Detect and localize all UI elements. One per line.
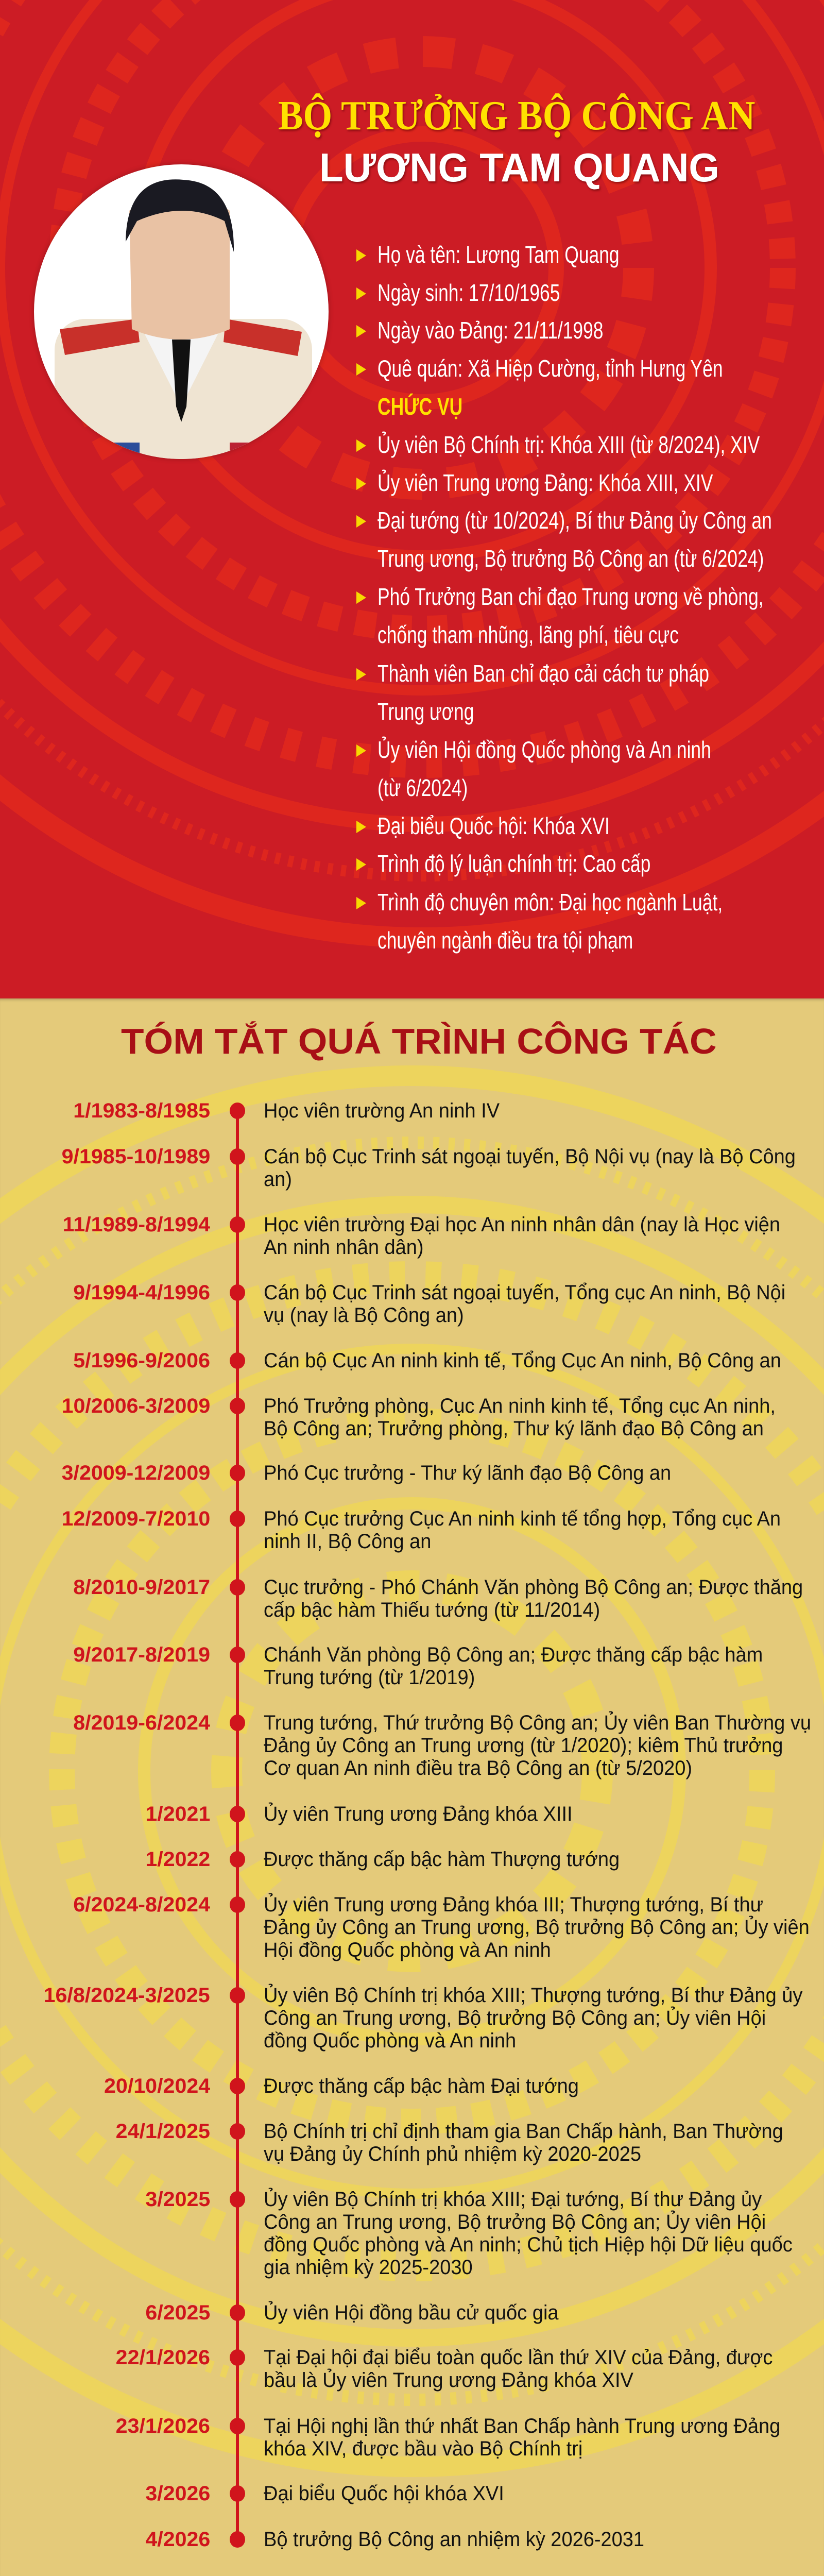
entry 9/1994: 9/1994-4/1996: [73, 1281, 210, 1304]
entry 8/2010: Cục trưởng - Phó Chánh Văn phòng Bộ Công an; Được thăng: [264, 1576, 803, 1599]
timeline entries: đồng Quốc phòng và An ninh: [264, 2029, 516, 2052]
info list: personal: Trung ương: [377, 698, 474, 725]
bullet: party: [356, 317, 603, 344]
entry 3/2009: 3/2009-12/2009: [61, 1462, 210, 1484]
entry 8/2019: [73, 1711, 811, 1780]
entry 1/1983: 1/1983-8/1985: [73, 1099, 210, 1122]
timeline entries: gia nhiệm kỳ 2025-2030: [264, 2256, 473, 2279]
info list: personal: Đại biểu Quốc hội: Khóa XVI: [377, 812, 610, 839]
entry 6/2024: [73, 1893, 810, 1961]
timeline line: [236, 1111, 239, 2540]
bullet: [356, 469, 713, 496]
entry 23/1/2026: 23/1/2026: [116, 2415, 210, 2437]
timeline entries: Trung tướng (từ 1/2019): [264, 1666, 475, 1689]
bullet: [356, 507, 772, 572]
entry 6/2024: Ủy viên Trung ương Đảng khóa III; Thượng tướng, Bí thư: [264, 1893, 763, 1916]
entry 10/2006: Phó Trưởng phòng, Cục An ninh kinh tế, Tổng cục An ninh,: [264, 1395, 776, 1417]
timeline entries: vụ Đảng ủy Chính phủ nhiệm kỳ 2020-2025: [264, 2143, 641, 2165]
info list: personal: [356, 241, 772, 954]
bullet: [356, 850, 650, 877]
entry 6/2024: 6/2024-8/2024: [73, 1893, 210, 1916]
entry 8/2010: 8/2010-9/2017: [73, 1576, 210, 1599]
info list: personal: Thành viên Ban chỉ đạo cải cách tư pháp: [377, 660, 709, 687]
timeline entries: Công an Trung ương, Bộ trưởng Bộ Công an; Ủy viên Hội: [264, 2211, 766, 2233]
entry 8/2019: Trung tướng, Thứ trưởng Bộ Công an; Ủy viên Ban Thường vụ: [264, 1711, 811, 1734]
entry 11/1989: 11/1989-8/1994: [63, 1213, 210, 1236]
info list: personal: Phó Trưởng Ban chỉ đạo Trung ương về phòng,: [377, 583, 764, 610]
entry 3/2026: [145, 2482, 504, 2505]
entry 8/2019: 8/2019-6/2024: [73, 1711, 210, 1734]
bullet: [356, 889, 723, 954]
entry 6/2025: Ủy viên Hội đồng bầu cử quốc gia: [264, 2301, 559, 2324]
timeline entries: an): [264, 1168, 292, 1191]
entry 9/2017: Chánh Văn phòng Bộ Công an; Được thăng cấp bậc hàm: [264, 1643, 763, 1666]
entry 1/2022: 1/2022: [145, 1848, 210, 1871]
entry 16/8/2024: Ủy viên Bộ Chính trị khóa XIII; Thượng tướng, Bí thư Đảng ủy: [264, 1984, 802, 2007]
info list: personal: Ngày vào Đảng: 21/11/1998: [377, 317, 603, 344]
entry 9/2017: [73, 1643, 763, 1689]
info list: personal: Ủy viên Bộ Chính trị: Khóa XIII (từ 8/2024), XIV: [377, 431, 760, 458]
entry 9/1994: [73, 1281, 785, 1327]
info list: personal: chuyên ngành điều tra tội phạm: [377, 927, 633, 954]
info list: personal: CHỨC VỤ: [377, 393, 462, 420]
timeline entries: Đảng ủy Công an Trung ương, Bộ trưởng Bộ Công an; Ủy viên: [264, 1916, 810, 1939]
entry 16/8/2024: 16/8/2024-3/2025: [44, 1984, 210, 2007]
bullet: [356, 431, 760, 458]
info list: personal: Trung ương, Bộ trưởng Bộ Công an (từ 6/2024): [377, 545, 764, 572]
timeline entries: khóa XIV, được bầu vào Bộ Chính trị: [264, 2437, 582, 2460]
entry 22/1/2026: [116, 2346, 772, 2392]
entry 23/1/2026: [116, 2415, 780, 2460]
timeline entries: [44, 1099, 811, 2551]
bullet: name: [356, 241, 620, 268]
entry 9/1985: Cán bộ Cục Trinh sát ngoại tuyến, Bộ Nội vụ (nay là Bộ Công: [264, 1145, 796, 1168]
bullet: [356, 660, 709, 725]
entry 3/2025: 3/2025: [145, 2188, 210, 2211]
info list: personal: Đại tướng (từ 10/2024), Bí thư Đảng ủy Công an: [377, 507, 772, 534]
entry 11/1989: [63, 1213, 780, 1259]
timeline entries: bầu là Ủy viên Trung ương Đảng khóa XIV: [264, 2369, 633, 2392]
entry 24/1/2025: Bộ Chính trị chỉ định tham gia Ban Chấp hành, Ban Thường: [264, 2120, 783, 2143]
timeline entries: Hội đồng Quốc phòng và An ninh: [264, 1939, 551, 1961]
panel: beige timeline background pattern: [0, 998, 824, 2576]
info list: personal: Ngày sinh: 17/10/1965: [377, 279, 560, 306]
info list: personal: (từ 6/2024): [377, 774, 468, 801]
entry 1/2021: Ủy viên Trung ương Đảng khóa XIII: [264, 1803, 573, 1825]
info list: personal: Trình độ lý luận chính trị: Cao cấp: [377, 850, 650, 877]
bullet: [356, 736, 711, 801]
title: BỘ TRƯỞNG BỘ CÔNG AN: BỘ TRƯỞNG BỘ CÔNG AN: [278, 93, 755, 139]
entry 10/2006: 10/2006-3/2009: [61, 1395, 210, 1417]
info list: personal: chống tham nhũng, lãng phí, tiêu cực: [377, 621, 679, 648]
timeline entries: An ninh nhân dân): [264, 1236, 424, 1259]
info list: personal: Ủy viên Hội đồng Quốc phòng và An ninh: [377, 736, 711, 763]
entry 5/1996: 5/1996-9/2006: [73, 1349, 210, 1372]
timeline entries: Bộ Công an; Trưởng phòng, Thư ký lãnh đạo Bộ Công an: [264, 1417, 764, 1440]
entry 3/2009: [61, 1462, 671, 1484]
entry 12/2009: [61, 1507, 781, 1553]
panel: red header background: [0, 0, 824, 998]
entry 9/1985: 9/1985-10/1989: [61, 1145, 210, 1168]
entry 12/2009: Phó Cục trưởng Cục An ninh kinh tế tổng hợp, Tổng cục An: [264, 1507, 781, 1530]
entry 16/8/2024: [44, 1984, 802, 2052]
entry 4/2026: 4/2026: [145, 2528, 210, 2551]
info list: personal: Trình độ chuyên môn: Đại học ngành Luật,: [377, 889, 723, 916]
entry 20/10/2024: 20/10/2024: [104, 2075, 210, 2097]
title: name: LƯƠNG TAM QUANG: [319, 145, 719, 190]
bullet: birth: [356, 279, 560, 306]
entry 3/2026: Đại biểu Quốc hội khóa XVI: [264, 2482, 504, 2505]
entry 22/1/2026: Tại Đại hội đại biểu toàn quốc lần thứ XIV của Đảng, được: [264, 2346, 772, 2369]
portrait photo: [34, 164, 329, 459]
info list: personal: Quê quán: Xã Hiệp Cường, tỉnh Hưng Yên: [377, 355, 723, 382]
entry 6/2025: 6/2025: [145, 2301, 210, 2324]
entry 1/1983: Học viên trường An ninh IV: [264, 1099, 500, 1122]
entry 1/2021: 1/2021: [145, 1803, 210, 1825]
entry 20/10/2024: [104, 2075, 579, 2097]
entry 12/2009: 12/2009-7/2010: [61, 1507, 210, 1530]
timeline entries: cấp bậc hàm Thiếu tướng (từ 11/2014): [264, 1599, 600, 1621]
timeline entries: Cơ quan An ninh điều tra Bộ Công an (từ 5/2020): [264, 1757, 692, 1780]
entry 9/2017: 9/2017-8/2019: [73, 1643, 210, 1666]
timeline entries: ninh II, Bộ Công an: [264, 1530, 431, 1553]
bullet: hometown: [356, 355, 723, 382]
timeline entries: Công an Trung ương, Bộ trưởng Bộ Công an; Ủy viên Hội: [264, 2007, 766, 2029]
bullet: [356, 812, 610, 839]
entry 3/2009: Phó Cục trưởng - Thư ký lãnh đạo Bộ Công an: [264, 1462, 671, 1484]
info list: personal: Họ và tên: Lương Tam Quang: [377, 241, 620, 268]
info list: personal: Ủy viên Trung ương Đảng: Khóa XIII, XIV: [377, 469, 713, 496]
timeline entries: vụ (nay là Bộ Công an): [264, 1304, 464, 1327]
entry 22/1/2026: 22/1/2026: [116, 2346, 210, 2369]
timeline entries: đồng Quốc phòng và An ninh; Chủ tịch Hiệp hội Dữ liệu quốc: [264, 2233, 793, 2256]
entry 10/2006: [61, 1395, 776, 1440]
entry 9/1985: [61, 1145, 796, 1191]
entry 9/1994: Cán bộ Cục Trinh sát ngoại tuyến, Tổng cục An ninh, Bộ Nội: [264, 1281, 785, 1304]
entry 3/2025: [145, 2188, 793, 2279]
heading: TÓM TẮT QUÁ TRÌNH CÔNG TÁC: TÓM TẮT QUÁ TRÌNH CÔNG TÁC: [121, 1021, 717, 1061]
entry 1/1983: [73, 1099, 500, 1122]
entry 8/2010: [73, 1576, 803, 1621]
timeline entries: Đảng ủy Công an Trung ương (từ 1/2020); kiêm Thủ trưởng: [264, 1734, 783, 1757]
entry 11/1989: Học viên trường Đại học An ninh nhân dân (nay là Học viện: [264, 1213, 780, 1236]
entry 3/2025: Ủy viên Bộ Chính trị khóa XIII; Đại tướng, Bí thư Đảng ủy: [264, 2188, 762, 2211]
entry 24/1/2025: 24/1/2025: [116, 2120, 210, 2143]
entry 23/1/2026: Tại Hội nghị lần thứ nhất Ban Chấp hành Trung ương Đảng: [264, 2415, 780, 2437]
bullet: [356, 583, 764, 648]
entry 20/10/2024: Được thăng cấp bậc hàm Đại tướng: [264, 2075, 579, 2097]
entry 4/2026: Bộ trưởng Bộ Công an nhiệm kỳ 2026-2031: [264, 2528, 644, 2551]
entry 1/2022: Được thăng cấp bậc hàm Thượng tướng: [264, 1848, 620, 1871]
entry 5/1996: Cán bộ Cục An ninh kinh tế, Tổng Cục An ninh, Bộ Công an: [264, 1349, 781, 1372]
entry 3/2026: 3/2026: [145, 2482, 210, 2505]
entry 24/1/2025: [116, 2120, 783, 2165]
